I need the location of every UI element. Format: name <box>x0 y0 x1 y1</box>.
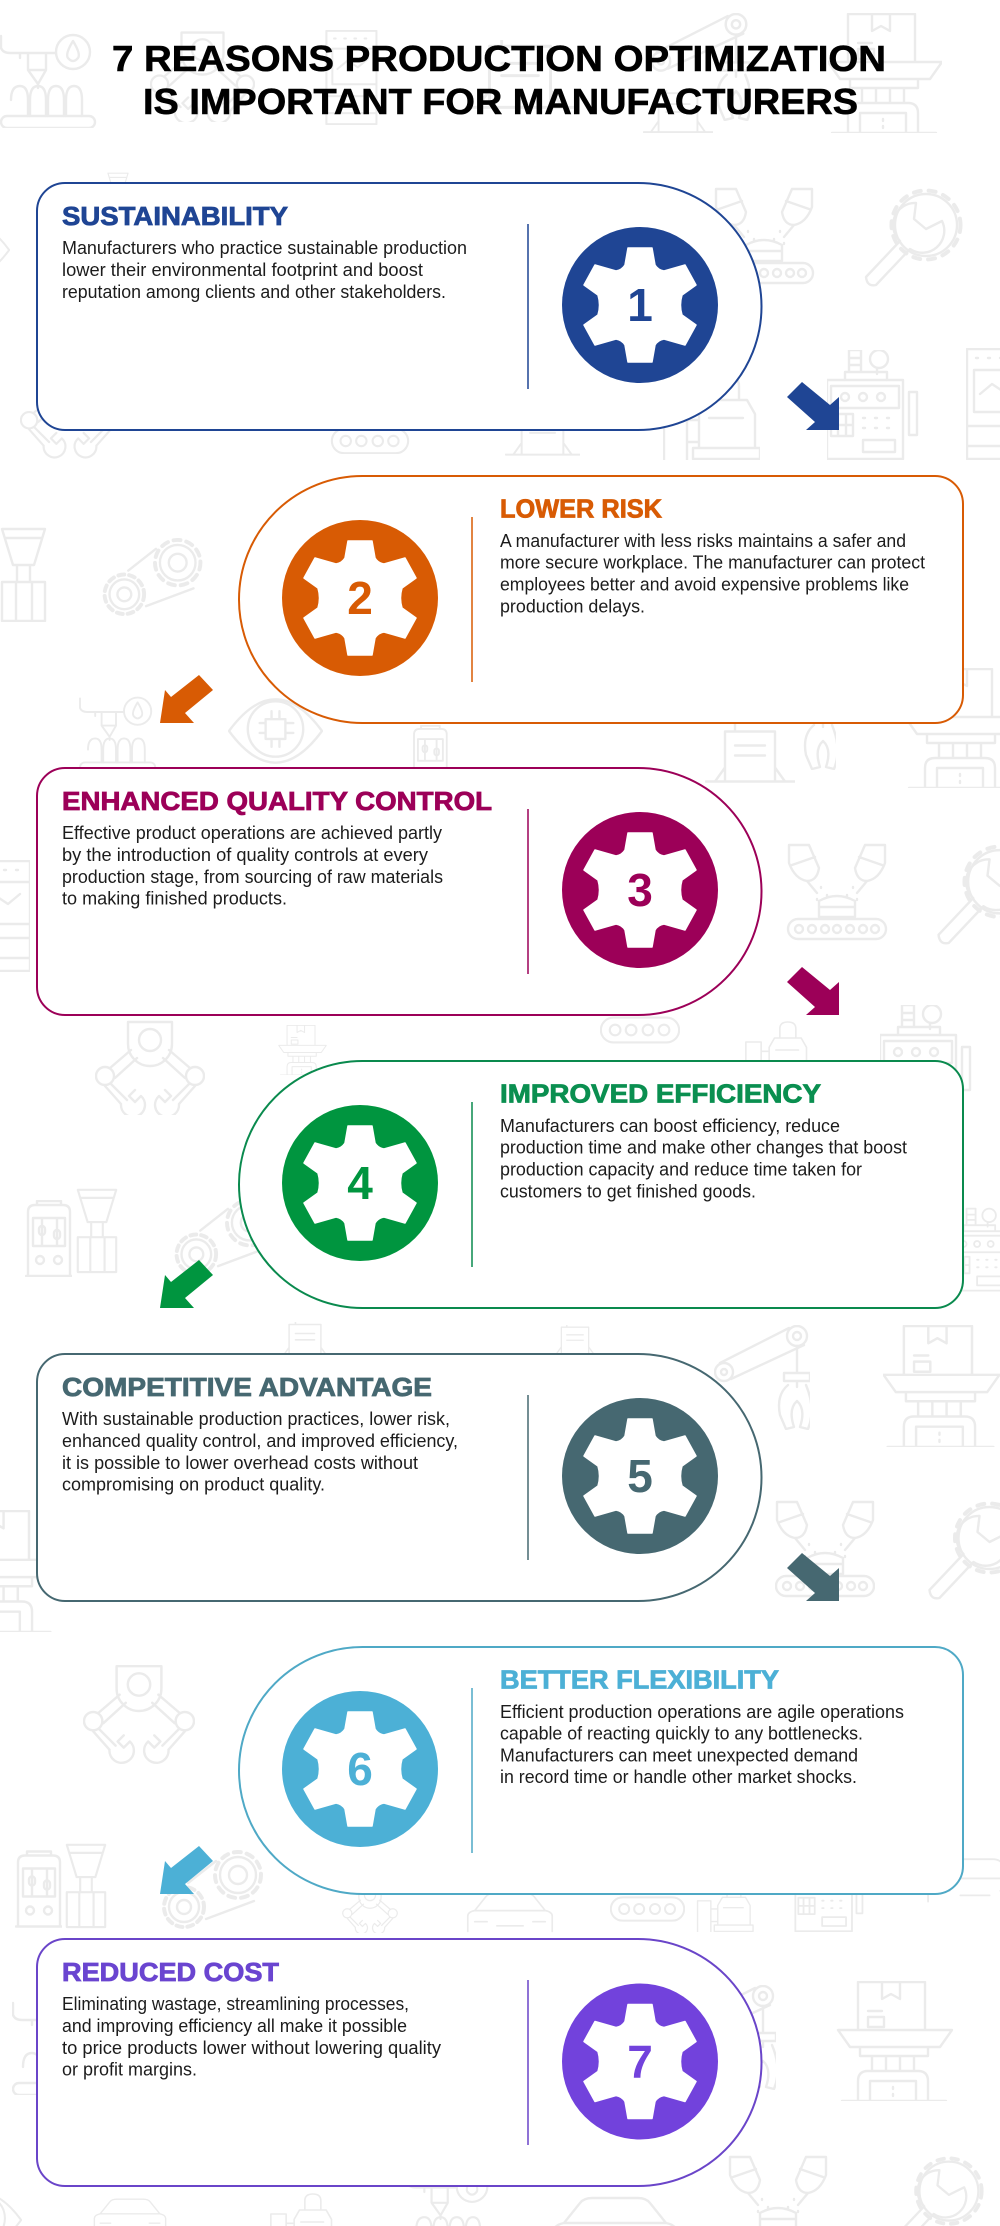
heading: lower risk: LOWER RISK <box>500 494 662 524</box>
text block: improved efficiency <box>500 1116 907 1202</box>
text block: lower risk: more secure workplace. The manufacturer can protect <box>500 552 925 572</box>
heading: competitive advantage: COMPETITIVE ADVANTAGE <box>62 1372 432 1402</box>
panel: reduced cost <box>37 1939 762 2186</box>
text block: reduced cost: Eliminating wastage, streamlining processes, <box>62 1994 409 2014</box>
text block: better flexibility: capable of reacting quickly to any bottlenecks. <box>500 1724 863 1744</box>
heading: better flexibility: BETTER FLEXIBILITY <box>500 1664 779 1694</box>
title: IS IMPORTANT FOR MANUFACTURERS <box>143 81 858 122</box>
text block: enhanced quality control: production stage, from sourcing of raw materials <box>62 867 443 887</box>
text block: sustainability: Manufacturers who practice sustainable production <box>62 238 467 258</box>
icon: gear number 2: 2 <box>347 572 373 624</box>
icon: gear number 2 <box>282 520 438 676</box>
icon: gear number 3 <box>562 812 718 968</box>
icon: gear number 7 <box>562 1984 718 2140</box>
heading: sustainability: SUSTAINABILITY <box>62 201 288 231</box>
text block: sustainability <box>62 238 467 302</box>
text block: enhanced quality control: by the introduction of quality controls at every <box>62 845 428 865</box>
text block: reduced cost: or profit margins. <box>62 2060 197 2080</box>
title: 7 REASONS PRODUCTION OPTIMIZATION <box>112 38 886 79</box>
icon: gear number 4: 4 <box>347 1157 373 1209</box>
text block: reduced cost <box>62 1994 441 2080</box>
icon: gear number 5: 5 <box>627 1450 653 1502</box>
text block: sustainability: reputation among clients and other stakeholders. <box>62 282 446 302</box>
panel: better flexibility <box>239 1647 963 1894</box>
heading: reduced cost: REDUCED COST <box>62 1957 279 1987</box>
heading: improved efficiency: IMPROVED EFFICIENCY <box>500 1078 821 1108</box>
icon: gear number 3: 3 <box>627 864 653 916</box>
panel: enhanced quality control <box>37 768 762 1015</box>
text block: improved efficiency: production capacity and reduce time taken for <box>500 1160 862 1180</box>
text block: lower risk: production delays. <box>500 596 645 616</box>
text block: competitive advantage: enhanced quality control, and improved efficiency, <box>62 1431 458 1451</box>
text block: lower risk: employees better and avoid expensive problems like <box>500 574 909 594</box>
text block: improved efficiency: Manufacturers can boost efficiency, reduce <box>500 1116 840 1136</box>
text block: better flexibility: Manufacturers can meet unexpected demand <box>500 1746 858 1766</box>
icon: gear number 1 <box>562 227 718 383</box>
icon: gear number 5 <box>562 1398 718 1554</box>
arrow: 5 to 6 <box>787 1553 839 1601</box>
icon: gear number 4 <box>282 1105 438 1261</box>
icon: gear number 6 <box>282 1691 438 1847</box>
text block: reduced cost: to price products lower without lowering quality <box>62 2038 441 2058</box>
text block: better flexibility <box>500 1702 904 1787</box>
panel: lower risk <box>239 476 963 723</box>
heading: enhanced quality control: ENHANCED QUALITY CONTROL <box>62 786 492 816</box>
arrow: 2 to 3 <box>160 675 213 723</box>
text block: enhanced quality control <box>62 823 443 908</box>
arrow: 4 to 5 <box>160 1260 213 1308</box>
panel: improved efficiency <box>239 1061 963 1308</box>
text block: competitive advantage: With sustainable production practices, lower risk, <box>62 1409 450 1429</box>
text block: improved efficiency: customers to get finished goods. <box>500 1182 756 1202</box>
text block: competitive advantage: it is possible to lower overhead costs without <box>62 1453 418 1473</box>
title <box>112 38 886 122</box>
text block: sustainability: lower their environmental footprint and boost <box>62 260 423 280</box>
arrow: 3 to 4 <box>787 967 839 1015</box>
panel: sustainability <box>37 183 762 430</box>
arrow: 1 to 2 <box>787 382 839 430</box>
text block: enhanced quality control: Effective product operations are achieved partly <box>62 823 442 843</box>
text block: improved efficiency: production time and make other changes that boost <box>500 1138 907 1158</box>
text block: better flexibility: in record time or handle other market shocks. <box>500 1767 857 1787</box>
arrow: 6 to 7 <box>160 1846 213 1894</box>
icon: gear number 7: 7 <box>627 2036 653 2088</box>
text block: better flexibility: Efficient production operations are agile operations <box>500 1702 904 1722</box>
text block: competitive advantage: compromising on product quality. <box>62 1474 325 1494</box>
text block: competitive advantage <box>62 1409 458 1494</box>
text block: enhanced quality control: to making finished products. <box>62 888 287 908</box>
text block: reduced cost: and improving efficiency all make it possible <box>62 2016 407 2036</box>
text block: lower risk <box>500 531 925 616</box>
text block: lower risk: A manufacturer with less risks maintains a safer and <box>500 531 906 551</box>
panel: competitive advantage <box>37 1354 762 1601</box>
icon: gear number 6: 6 <box>347 1743 373 1795</box>
icon: gear number 1: 1 <box>627 279 653 331</box>
